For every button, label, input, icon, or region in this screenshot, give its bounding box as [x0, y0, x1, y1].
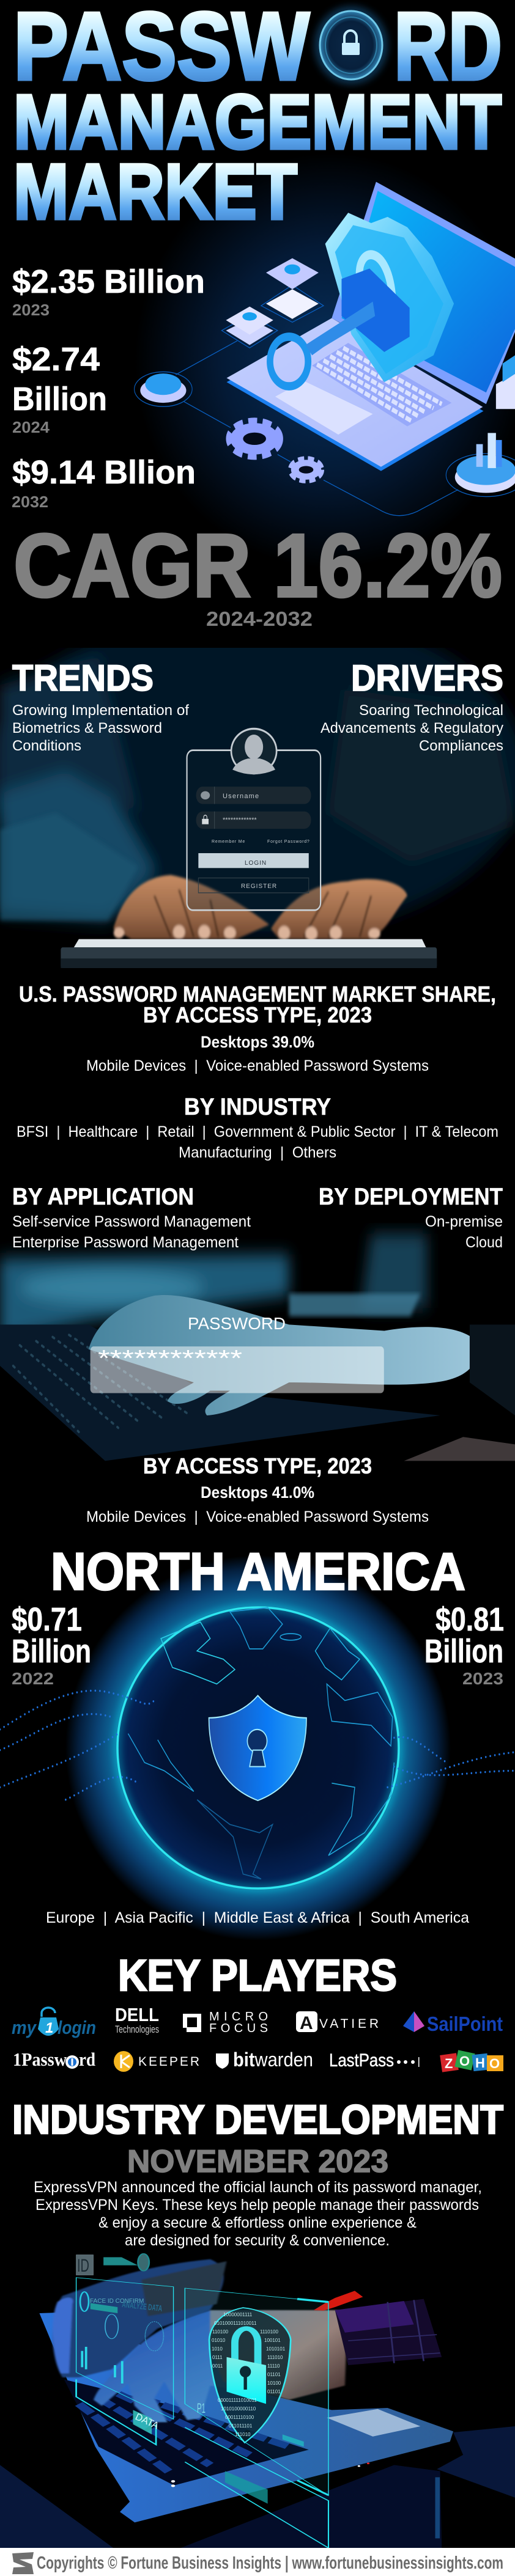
- heading and text: drivers: DRIVERS: [351, 658, 503, 699]
- panel: by deployment: [319, 1184, 503, 1251]
- panel: by application: [12, 1184, 251, 1251]
- stat: north america 2022: $0.71: [12, 1601, 82, 1638]
- stat: 2023: 2023: [12, 301, 50, 319]
- panel: U.S. market share: BY ACCESS TYPE, 2023: [143, 1002, 372, 1027]
- heading and text: trends: [12, 658, 189, 754]
- icon: padlock: [360, 255, 393, 299]
- logo: my1login: [12, 2008, 96, 2038]
- stat: 2032: $9.14 Bllion: [12, 454, 196, 491]
- logo: SailPoint: [403, 2011, 503, 2035]
- panel: by application: BY APPLICATION: [12, 1184, 194, 1210]
- footer bar: [0, 2548, 515, 2576]
- panel: by deployment: Cloud: [465, 1234, 503, 1251]
- logo: Bitwarden: bitwarden: [233, 2049, 313, 2071]
- heading and text: drivers: [320, 658, 503, 754]
- laptop keyboard: [64, 2379, 309, 2486]
- binary text on shield: 01010: [212, 2338, 226, 2343]
- icon: binary shield with padlock: [209, 2308, 291, 2443]
- password field text: [98, 1314, 286, 1371]
- login form labels: Username: [223, 793, 259, 800]
- stat: north america 2022: 2022: [12, 1669, 54, 1688]
- binary text on shield: [212, 2312, 286, 2437]
- login card frame: [187, 728, 320, 910]
- subheading: date: NOVEMBER 2023: [127, 2144, 388, 2179]
- overlay labels: [77, 2256, 206, 2432]
- icon: Fortune Business Insights logo: [12, 2552, 34, 2574]
- binary text on shield: 11110: [267, 2363, 280, 2369]
- icon: hands: [89, 1295, 515, 1415]
- stat: 2024: $2.74: [12, 341, 100, 378]
- overlay widgets: [80, 2254, 369, 2504]
- sleeve: [314, 2291, 442, 2365]
- heading: key players: KEY PLAYERS: [118, 1951, 397, 2000]
- icon: disc: [140, 378, 186, 403]
- stat: 2024: Billion: [12, 381, 107, 417]
- binary text on shield: 110100: [212, 2329, 229, 2335]
- panel: by application: Enterprise Password Management: [12, 1234, 239, 1251]
- ID box: [76, 2255, 94, 2275]
- login form labels: [212, 793, 310, 890]
- icon: hands: [113, 875, 407, 941]
- overlay labels: ANALYZE DATA: [122, 2299, 163, 2313]
- binary text on shield: 100101: [264, 2338, 281, 2343]
- binary text on shield: 00011110100: [225, 2415, 254, 2420]
- logo: SailPoint: SailPoint: [427, 2013, 503, 2035]
- dotted data waves: [0, 1690, 515, 1800]
- logo: my1login: my: [12, 2017, 37, 2038]
- binary text on shield: 0011: [212, 2363, 223, 2369]
- continents: [128, 1607, 394, 1879]
- binary text on shield: 1010101: [266, 2346, 286, 2352]
- overlay frames: [76, 2278, 328, 2548]
- panel: by deployment: On-premise: [425, 1213, 503, 1230]
- binary text on shield: 10100: [267, 2380, 281, 2386]
- overlay labels: ID: [77, 2256, 89, 2276]
- logo: Keeper: KEEPER: [138, 2055, 199, 2069]
- logo: Zoho: [440, 2050, 503, 2072]
- connector lines: [135, 285, 515, 516]
- icon: side servers: [496, 355, 515, 409]
- panel: by application: Self-service Password Management: [12, 1213, 251, 1230]
- stat: north america 2022: [12, 1601, 91, 1688]
- icon: shield with keyhole: [209, 1695, 306, 1800]
- logo: my1login: 1: [45, 2020, 53, 2036]
- logo: Avatier: [296, 2011, 379, 2033]
- heading and text: trends: Growing Implementation of: [12, 702, 189, 719]
- binary text on shield: 111010: [267, 2355, 283, 2360]
- panel: U.S. market share: [19, 982, 496, 1074]
- text: development description: ExpressVPN Keys. These keys help people manage their passwords: [35, 2196, 479, 2214]
- binary text on shield: 111010: [235, 2432, 251, 2437]
- icon: keyboard: [61, 939, 437, 968]
- logo: Keeper: [114, 2051, 199, 2072]
- binary text on shield: 000011111010011: [218, 2398, 257, 2403]
- login form labels: LOGIN: [245, 860, 267, 867]
- overlay labels: DATA: [133, 2412, 160, 2432]
- text: development description: [34, 2179, 482, 2249]
- logos: key players: [12, 2004, 503, 2072]
- binary text on shield: 01101: [267, 2372, 281, 2377]
- lower hand: [94, 2310, 347, 2422]
- stat: 2023: [12, 263, 205, 319]
- login form labels: REGISTER: [241, 883, 277, 890]
- icon: laptop screen: [332, 182, 515, 404]
- logo: LastPass: LastPass: [329, 2050, 394, 2071]
- icon: key: [270, 337, 308, 386]
- login form labels: *************: [223, 816, 257, 824]
- photo: laptop with cyber security overlay: [0, 2254, 515, 2548]
- overlay labels: P1: [197, 2401, 206, 2416]
- heading and text: trends: TRENDS: [12, 658, 154, 699]
- binary text on shield: 0101000111010011: [214, 2321, 257, 2326]
- binary text on shield: 1010: [212, 2346, 223, 2352]
- text: development description: ExpressVPN announced the official launch of its password manager,: [34, 2179, 482, 2196]
- stat: north america 2022: Billion: [12, 1633, 91, 1670]
- stat: 2024: 2024: [12, 418, 50, 436]
- logo: 1Password: rd: [79, 2049, 95, 2070]
- password field text: PASSWORD: [188, 1314, 286, 1333]
- panel: by industry: Manufacturing | Others: [179, 1144, 336, 1161]
- icon: laptop base: [227, 322, 483, 471]
- panel: global access type: Mobile Devices | Voice-enabled Password Systems: [86, 1508, 429, 1525]
- logo: Dell Technologies: Technologies: [115, 2024, 159, 2035]
- logo: Avatier: VATIER: [319, 2017, 379, 2031]
- password field: [91, 1346, 384, 1393]
- stat: 2024: [12, 341, 107, 436]
- icon: chart platform: [455, 433, 515, 493]
- binary text on shield: 01101: [267, 2389, 281, 2394]
- photo: hand over laptop with password field: [0, 1234, 515, 1461]
- text: development description: are designed for security & convenience.: [125, 2232, 390, 2249]
- logo: Dell Technologies: DELL: [115, 2004, 159, 2025]
- CAGR: 2024-2032: [206, 607, 313, 630]
- heading and text: drivers: Advancements & Regulatory: [320, 720, 503, 736]
- icon: shield: [325, 213, 454, 382]
- panel: U.S. market share: Desktops 39.0%: [201, 1033, 314, 1051]
- logo: my1login: login: [57, 2017, 96, 2038]
- heading: north america: NORTH AMERICA: [51, 1543, 465, 1601]
- heading and text: trends: Biometrics & Password: [12, 720, 162, 736]
- password field text: ************: [98, 1346, 242, 1371]
- panel: by industry: BY INDUSTRY: [184, 1094, 331, 1120]
- panel: U.S. market share: Mobile Devices | Voice-enabled Password Systems: [86, 1057, 429, 1074]
- panel: global access type: BY ACCESS TYPE, 2023: [143, 1453, 372, 1478]
- binary text on shield: 1110100: [260, 2329, 279, 2335]
- icon: gears: [230, 423, 321, 480]
- logo: Micro Focus: FOCUS: [209, 2022, 268, 2035]
- logo: Avatier: A: [300, 2013, 313, 2033]
- illustration: globe with shield: [0, 1555, 515, 1940]
- login form labels: Forgot Password?: [267, 840, 310, 844]
- stat: 2032: [12, 454, 196, 511]
- panel: global access type: [86, 1453, 429, 1525]
- title: MARKET: [13, 148, 297, 236]
- logo: Zoho: O: [489, 2056, 500, 2071]
- binary text on shield: 011011101: [229, 2423, 253, 2429]
- title: [13, 0, 502, 236]
- logo: Zoho: H: [475, 2055, 485, 2071]
- heading and text: drivers: Compliances: [419, 738, 503, 754]
- logo: Micro Focus: [183, 2010, 268, 2035]
- binary text on shield: 10000001111: [223, 2312, 253, 2317]
- photo: person typing at keyboard: [0, 648, 515, 968]
- binary text on shield: 1010100000110: [221, 2406, 256, 2412]
- icon: data blocks: [266, 289, 319, 319]
- upper hand: [53, 2259, 227, 2377]
- stat: 2032: 2032: [12, 493, 48, 511]
- logo: Zoho: Z: [445, 2056, 453, 2071]
- heading and text: trends: Conditions: [12, 738, 81, 754]
- panel: global access type: Desktops 41.0%: [201, 1483, 314, 1502]
- fabric surface: [0, 2426, 515, 2548]
- stat: 2023: $2.35 Billion: [12, 263, 205, 300]
- logo: Zoho: O: [459, 2053, 470, 2069]
- panel: by industry: [17, 1094, 498, 1161]
- overlay labels: FACE ID CONFIRM: [90, 2298, 144, 2305]
- market size figures: [12, 263, 205, 511]
- heading and text: drivers: Soaring Technological: [359, 702, 503, 719]
- binary text on shield: 0111: [212, 2355, 223, 2360]
- illustration: laptop with shield, lock and key: [135, 153, 515, 568]
- logo: Micro Focus: MICRO: [209, 2010, 268, 2024]
- laptop palm rest: [39, 2312, 453, 2522]
- icon: laptop keyboard: [0, 1324, 515, 1461]
- stat: north america 2023: [424, 1601, 504, 1688]
- text: development description: & enjoy a secure & effortless online experience &: [98, 2214, 417, 2231]
- login form labels: Remember Me: [212, 840, 245, 844]
- logo: Dell Technologies: [115, 2004, 159, 2035]
- regions list: Europe | Asia Pacific | Middle East & Africa | South America: [46, 1909, 469, 1926]
- trackpad: [327, 2409, 420, 2437]
- logo: 1Password: 1Passw: [13, 2049, 67, 2070]
- icon: glowing lock ring in title: [314, 6, 388, 84]
- stat: north america 2023: 2023: [462, 1669, 503, 1688]
- panel: by industry: BFSI | Healthcare | Retail | Government & Public Sector | IT & Telecom: [17, 1123, 498, 1140]
